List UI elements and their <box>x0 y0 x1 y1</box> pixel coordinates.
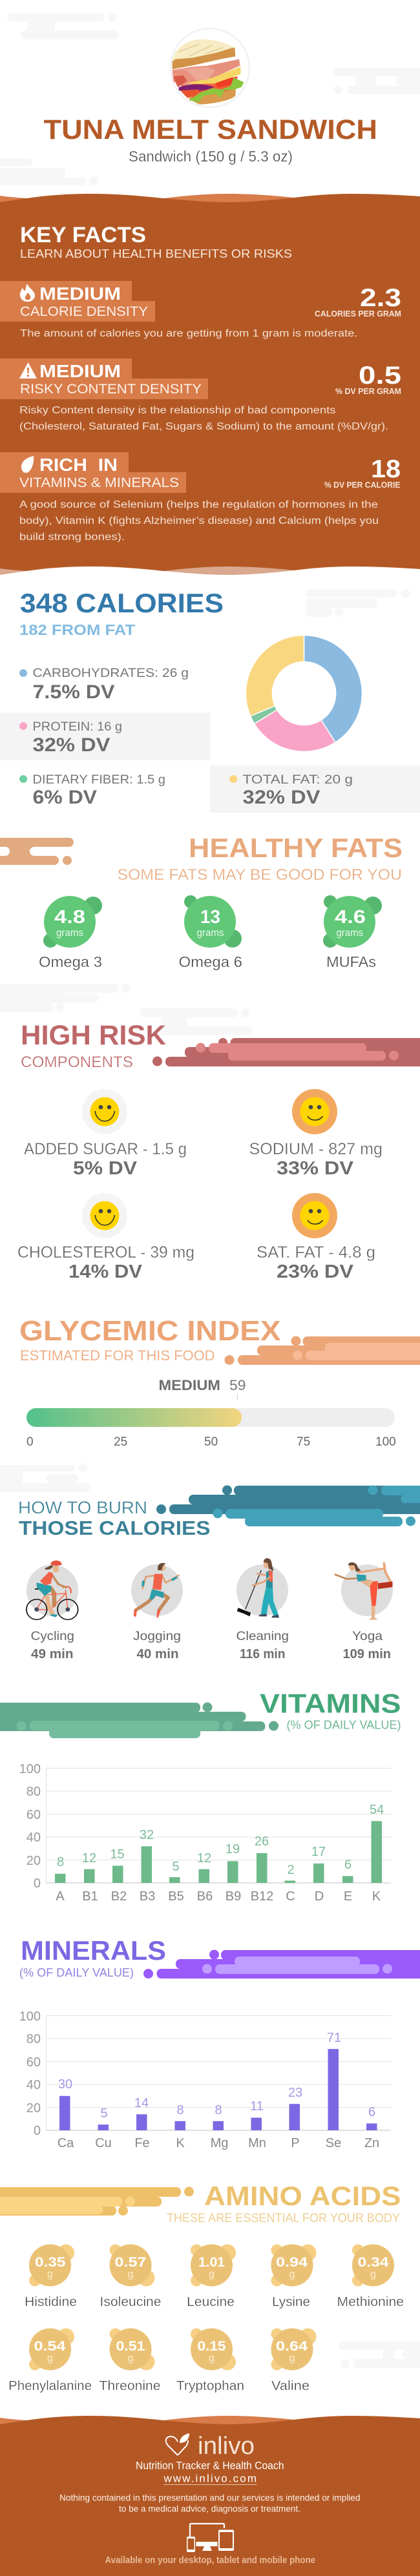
amino: threonine: Threonine <box>100 2379 160 2393</box>
text: rich in description: A good source of Selenium (helps the regulation of hormones in the <box>19 499 378 510</box>
amino: leucine: g <box>209 2269 215 2280</box>
amino: valine: Valine <box>271 2379 310 2393</box>
decoration: healthy fats bars <box>0 838 74 865</box>
donut chart: calorie sources <box>246 636 362 752</box>
label: cycling: Cycling <box>31 1630 74 1643</box>
bar chart: vitamins: 17 <box>311 1845 326 1859</box>
risk item: sodium <box>249 1089 383 1179</box>
legend: carbohydrates: 7.5% DV <box>32 681 115 703</box>
bar chart: minerals: Mg <box>211 2136 228 2150</box>
amino: tryptophan: g <box>209 2353 215 2364</box>
icon: sandwich photo <box>171 28 249 107</box>
heading: vitamins: VITAMINS <box>260 1688 401 1718</box>
label: yoga: 109 min <box>342 1647 391 1661</box>
bar chart: vitamins: B12 <box>251 1889 273 1904</box>
stat: dv per gram: % DV PER GRAM <box>335 387 401 396</box>
risk item: added sugar <box>24 1089 187 1179</box>
risk item: added sugar: 5% DV <box>73 1158 138 1179</box>
stat: calories per gram: CALORIES PER GRAM <box>315 309 401 318</box>
amino: histidine: g <box>47 2269 53 2280</box>
heading: key facts: KEY FACTS <box>20 223 146 247</box>
heading: healthy fats: HEALTHY FATS <box>189 833 403 863</box>
bar chart: minerals: K <box>176 2136 185 2150</box>
stat bubble: omega 3: grams <box>56 928 83 939</box>
amino: leucine <box>187 2244 236 2309</box>
legend: carbohydrates <box>19 666 189 703</box>
subheading: healthy fats: SOME FATS MAY BE GOOD FOR YOU <box>118 866 402 884</box>
heading: minerals: MINERALS <box>21 1935 166 1966</box>
stat: calories per gram <box>315 284 401 318</box>
stat: dv per calorie <box>324 455 401 490</box>
amino: phenylalanine: 0.54 <box>34 2339 66 2354</box>
stat bubble: omega 6 <box>178 895 242 970</box>
bar chart: minerals: Zn <box>364 2136 379 2150</box>
legend: carbohydrates: CARBOHYDRATES: 26 g <box>32 666 189 680</box>
bar chart: vitamins: 20 <box>26 1854 41 1868</box>
stat: dv per calorie: 18 <box>371 455 401 483</box>
decoration: glycemic index bars <box>225 1336 420 1365</box>
bar chart: minerals: 11 <box>250 2099 264 2114</box>
gauge: glycemic index <box>26 1377 396 1449</box>
heading: high risk: HIGH RISK <box>21 1020 166 1051</box>
icon: desktop tablet and phone <box>187 2524 234 2552</box>
label: cleaning: 116 min <box>240 1647 286 1661</box>
bar chart: vitamins <box>19 1762 391 1904</box>
badge: calorie density: MEDIUM <box>39 284 121 304</box>
stat bubble: omega 6: 13 <box>200 907 220 928</box>
text: calorie density description: The amount of calories you are getting from 1 gram is moderate. <box>20 328 358 339</box>
bar chart: minerals: 20 <box>26 2101 41 2115</box>
stat: calories per gram: 2.3 <box>360 284 401 312</box>
bar chart: vitamins: 0 <box>34 1876 41 1891</box>
bar chart: vitamins: 15 <box>110 1847 125 1862</box>
heading: glycemic index: GLYCEMIC INDEX <box>19 1315 280 1347</box>
amino: leucine: Leucine <box>187 2295 235 2309</box>
label: jogging: 40 min <box>137 1647 178 1661</box>
stat bubble: omega 6: grams <box>196 928 224 939</box>
text: risky content description <box>19 405 388 432</box>
badge: risky content density <box>0 358 208 399</box>
legend: total fat: 32% DV <box>243 787 320 808</box>
bar chart: vitamins: B1 <box>82 1889 98 1904</box>
bar chart: vitamins: 12 <box>197 1851 211 1865</box>
bar chart: vitamins: E <box>344 1889 352 1904</box>
stat bubble: mufas: grams <box>336 928 363 939</box>
badge: rich in vitamins and minerals <box>0 452 186 493</box>
legend: protein: 32% DV <box>32 734 110 756</box>
risk item: added sugar: ADDED SUGAR - 1.5 g <box>24 1140 187 1158</box>
bar chart: vitamins: 12 <box>82 1851 96 1865</box>
amino: lysine: g <box>289 2269 295 2280</box>
activity: cycling <box>26 1561 78 1619</box>
badge: risky content density: RISKY CONTENT DENSITY <box>20 382 202 397</box>
bar chart: vitamins: 5 <box>172 1860 180 1874</box>
icon: leaf <box>21 456 34 473</box>
bar chart: minerals: Cu <box>95 2136 112 2150</box>
panel: protein background <box>0 712 211 760</box>
bar chart: minerals: Mn <box>248 2136 266 2150</box>
logo wordmark: inlivo <box>198 2433 255 2460</box>
stat bubble: mufas <box>323 895 382 970</box>
risk item: cholesterol <box>17 1193 194 1282</box>
subtitle: Sandwich (150 g / 5.3 oz) <box>129 148 293 165</box>
amino: histidine: Histidine <box>25 2295 77 2309</box>
amino: methionine: 0.34 <box>358 2255 389 2270</box>
panel: key facts <box>0 194 420 579</box>
decoration: burn calories bars <box>156 1486 420 1526</box>
bar chart: vitamins: 80 <box>26 1785 41 1799</box>
amino: phenylalanine <box>8 2328 92 2393</box>
subheading: components: COMPONENTS <box>21 1054 133 1071</box>
text: disclaimer <box>59 2492 361 2514</box>
bar chart: vitamins: 100 <box>19 1762 41 1776</box>
decoration: minerals bars <box>143 1949 420 1979</box>
amino: valine <box>271 2328 317 2393</box>
text: disclaimer: to be a medical advice, diagnosis or treatment. <box>119 2504 300 2514</box>
amino: valine: g <box>289 2353 295 2364</box>
risk item: sodium: 33% DV <box>277 1158 354 1179</box>
text: disclaimer: Nothing contained in this presentation and our services is intended or implied <box>59 2492 361 2502</box>
subheading: minerals: (% OF DAILY VALUE) <box>19 1966 134 1979</box>
gauge: glycemic index: 59 <box>229 1377 246 1393</box>
amino: isoleucine: 0.57 <box>115 2255 146 2270</box>
bar chart: minerals: Ca <box>58 2136 74 2150</box>
subheading: amino acids: THESE ARE ESSENTIAL FOR YOUR BODY <box>167 2212 400 2225</box>
activity: cleaning <box>236 1558 288 1617</box>
heading: calories: 348 CALORIES <box>20 588 224 618</box>
amino: histidine: 0.35 <box>35 2255 66 2270</box>
badge: calorie density: CALORIE DENSITY <box>20 304 148 319</box>
bar chart: minerals: 0 <box>34 2124 41 2138</box>
bar chart: vitamins: 40 <box>26 1831 41 1845</box>
gauge: glycemic index: 50 <box>204 1435 218 1449</box>
amino: methionine: g <box>370 2269 376 2280</box>
badge: rich in vitamins and minerals: VITAMINS & MINERALS <box>19 475 179 490</box>
bar chart: vitamins: A <box>56 1889 65 1904</box>
bar chart: vitamins: D <box>315 1889 324 1904</box>
subheading: key facts: LEARN ABOUT HEALTH BENEFITS OR RISKS <box>20 247 292 260</box>
heading: amino acids: AMINO ACIDS <box>204 2181 401 2211</box>
amino: phenylalanine: g <box>47 2353 53 2364</box>
stat: dv per gram <box>335 362 401 396</box>
legend: protein: PROTEIN: 16 g <box>32 720 122 734</box>
heading: those calories: THOSE CALORIES <box>19 1517 211 1539</box>
bar chart: vitamins: C <box>286 1889 295 1904</box>
amino: methionine: Methionine <box>337 2295 404 2309</box>
bar chart: minerals: Fe <box>134 2136 150 2150</box>
amino: phenylalanine: Phenylalanine <box>8 2379 92 2393</box>
stat: dv per gram: 0.5 <box>359 362 401 390</box>
activity: jogging <box>131 1563 183 1618</box>
panel: total fat background <box>210 765 420 813</box>
bar chart: minerals: 14 <box>134 2096 149 2110</box>
text: rich in description: build strong bones). <box>19 532 125 543</box>
amino: lysine: Lysine <box>272 2295 310 2309</box>
title: TUNA MELT SANDWICH <box>44 114 377 145</box>
amino: methionine <box>337 2244 404 2309</box>
text: risky content description: Risky Content density is the relationship of bad components <box>19 405 336 416</box>
bar chart: vitamins: 26 <box>255 1834 269 1849</box>
bar chart: minerals: 80 <box>26 2032 41 2046</box>
stat bubble: omega 3: 4.8 <box>54 907 85 928</box>
label: jogging <box>133 1630 181 1661</box>
label: cleaning: Cleaning <box>236 1630 289 1643</box>
stat bubble: mufas: MUFAs <box>326 953 376 970</box>
gauge: glycemic index: 75 <box>297 1435 310 1449</box>
text: rich in description <box>19 499 379 543</box>
bar chart: vitamins: 8 <box>57 1855 64 1869</box>
bar chart: minerals: Se <box>326 2136 341 2150</box>
bar chart: vitamins: 32 <box>140 1828 154 1842</box>
amino: threonine: g <box>128 2353 133 2364</box>
stat bubble: omega 3: Omega 3 <box>39 953 102 970</box>
bar chart: vitamins: B3 <box>140 1889 155 1904</box>
risk item: saturated fat: 23% DV <box>277 1262 354 1282</box>
legend: dietary fiber: 6% DV <box>32 787 97 808</box>
bar chart: vitamins: 19 <box>226 1842 240 1856</box>
bar chart: vitamins: B9 <box>226 1889 241 1904</box>
amino: leucine: 1.01 <box>198 2255 225 2270</box>
amino: threonine <box>100 2328 160 2393</box>
text: availability: Available on your desktop, tablet and mobile phone <box>105 2555 315 2566</box>
text: rich in description: body), Vitamin K (fights Alzheimer’s disease) and Calcium (helps you <box>19 515 379 526</box>
bar chart: minerals: 8 <box>215 2103 222 2117</box>
risk item: cholesterol: 14% DV <box>68 1262 143 1282</box>
bar chart: vitamins: 2 <box>287 1863 295 1877</box>
bar chart: vitamins: 54 <box>370 1803 384 1817</box>
stat bubble: mufas: 4.6 <box>335 907 366 928</box>
badge: risky content density: MEDIUM <box>39 361 121 381</box>
label: cycling <box>31 1630 74 1661</box>
activity: yoga <box>335 1563 393 1620</box>
text: tagline: Nutrition Tracker & Health Coach <box>136 2460 284 2471</box>
bar chart: vitamins: B2 <box>111 1889 127 1904</box>
gauge: glycemic index: MEDIUM <box>159 1377 220 1393</box>
gauge: glycemic index: 100 <box>375 1435 396 1449</box>
panel: footer <box>0 2416 420 2576</box>
risk item: cholesterol: CHOLESTEROL - 39 mg <box>17 1243 194 1262</box>
amino: tryptophan <box>176 2328 244 2393</box>
risk item: sodium: SODIUM - 827 mg <box>249 1140 383 1158</box>
badge: calorie density <box>0 281 155 322</box>
risk item: saturated fat: SAT. FAT - 4.8 g <box>257 1243 375 1262</box>
gauge: glycemic index: 0 <box>26 1435 34 1449</box>
bar chart: vitamins: B5 <box>168 1889 184 1904</box>
bar chart: minerals: 40 <box>26 2078 41 2092</box>
stat bubble: omega 3 <box>39 896 102 970</box>
legend: dietary fiber: DIETARY FIBER: 1.5 g <box>32 773 165 787</box>
decoration: high risk bars <box>152 1038 420 1066</box>
text: website link: www.inlivo.com <box>163 2473 257 2484</box>
amino: valine: 0.64 <box>276 2339 308 2354</box>
icon: warning triangle <box>19 362 37 379</box>
label: cycling: 49 min <box>31 1647 74 1661</box>
amino: tryptophan: Tryptophan <box>176 2379 244 2393</box>
amino: isoleucine: g <box>128 2269 133 2280</box>
badge: rich in vitamins and minerals: RICH IN <box>39 455 118 475</box>
icon: flame <box>20 284 35 302</box>
stat bubble: omega 6: Omega 6 <box>178 953 242 970</box>
bar chart: minerals: P <box>291 2136 300 2150</box>
bar chart: minerals: 71 <box>327 2031 341 2045</box>
subheading: calories from fat: 182 FROM FAT <box>19 621 135 638</box>
amino: histidine <box>25 2244 77 2309</box>
bar chart: minerals: 100 <box>19 2010 41 2024</box>
legend: protein <box>19 720 122 756</box>
bar chart: vitamins: B6 <box>197 1889 213 1904</box>
label: cleaning <box>236 1630 289 1661</box>
subheading: vitamins: (% OF DAILY VALUE) <box>287 1718 401 1731</box>
bar chart: minerals: 23 <box>288 2086 302 2100</box>
bar chart: vitamins: K <box>372 1889 381 1904</box>
amino: isoleucine <box>100 2244 162 2309</box>
risk item: saturated fat <box>257 1193 375 1282</box>
bar chart: minerals: 30 <box>58 2077 72 2092</box>
decoration: vitamins bars <box>0 1703 278 1738</box>
bar chart: minerals: 8 <box>176 2103 184 2117</box>
gauge: glycemic index: 25 <box>114 1435 127 1449</box>
heading: how to burn: HOW TO BURN <box>18 1498 147 1517</box>
decoration: amino acids bars <box>0 2187 194 2216</box>
bar chart: vitamins: 6 <box>344 1858 352 1872</box>
amino: lysine: 0.94 <box>276 2255 308 2270</box>
legend: dietary fiber <box>19 773 165 808</box>
bar chart: minerals <box>19 2010 391 2150</box>
bar chart: minerals: 5 <box>100 2106 108 2121</box>
icon: inlivo heart logo <box>166 2433 189 2455</box>
bar chart: minerals: 60 <box>26 2055 41 2070</box>
label: jogging: Jogging <box>133 1630 181 1643</box>
stat: dv per calorie: % DV PER CALORIE <box>324 481 401 490</box>
bar chart: vitamins: 60 <box>26 1808 41 1822</box>
text: risky content description: (Cholesterol, Saturated Fat, Sugars & Sodium) to the amount (%DV/gr). <box>19 421 388 432</box>
legend: total fat: TOTAL FAT: 20 g <box>243 773 353 787</box>
amino: tryptophan: 0.15 <box>198 2339 226 2354</box>
amino: lysine <box>271 2244 317 2309</box>
legend: total fat <box>229 773 353 808</box>
subheading: glycemic index: ESTIMATED FOR THIS FOOD <box>20 1347 215 1364</box>
label: yoga <box>342 1630 391 1661</box>
amino: threonine: 0.51 <box>116 2339 145 2354</box>
amino: isoleucine: Isoleucine <box>100 2295 162 2309</box>
bar chart: minerals: 6 <box>368 2105 375 2119</box>
label: yoga: Yoga <box>352 1630 383 1643</box>
